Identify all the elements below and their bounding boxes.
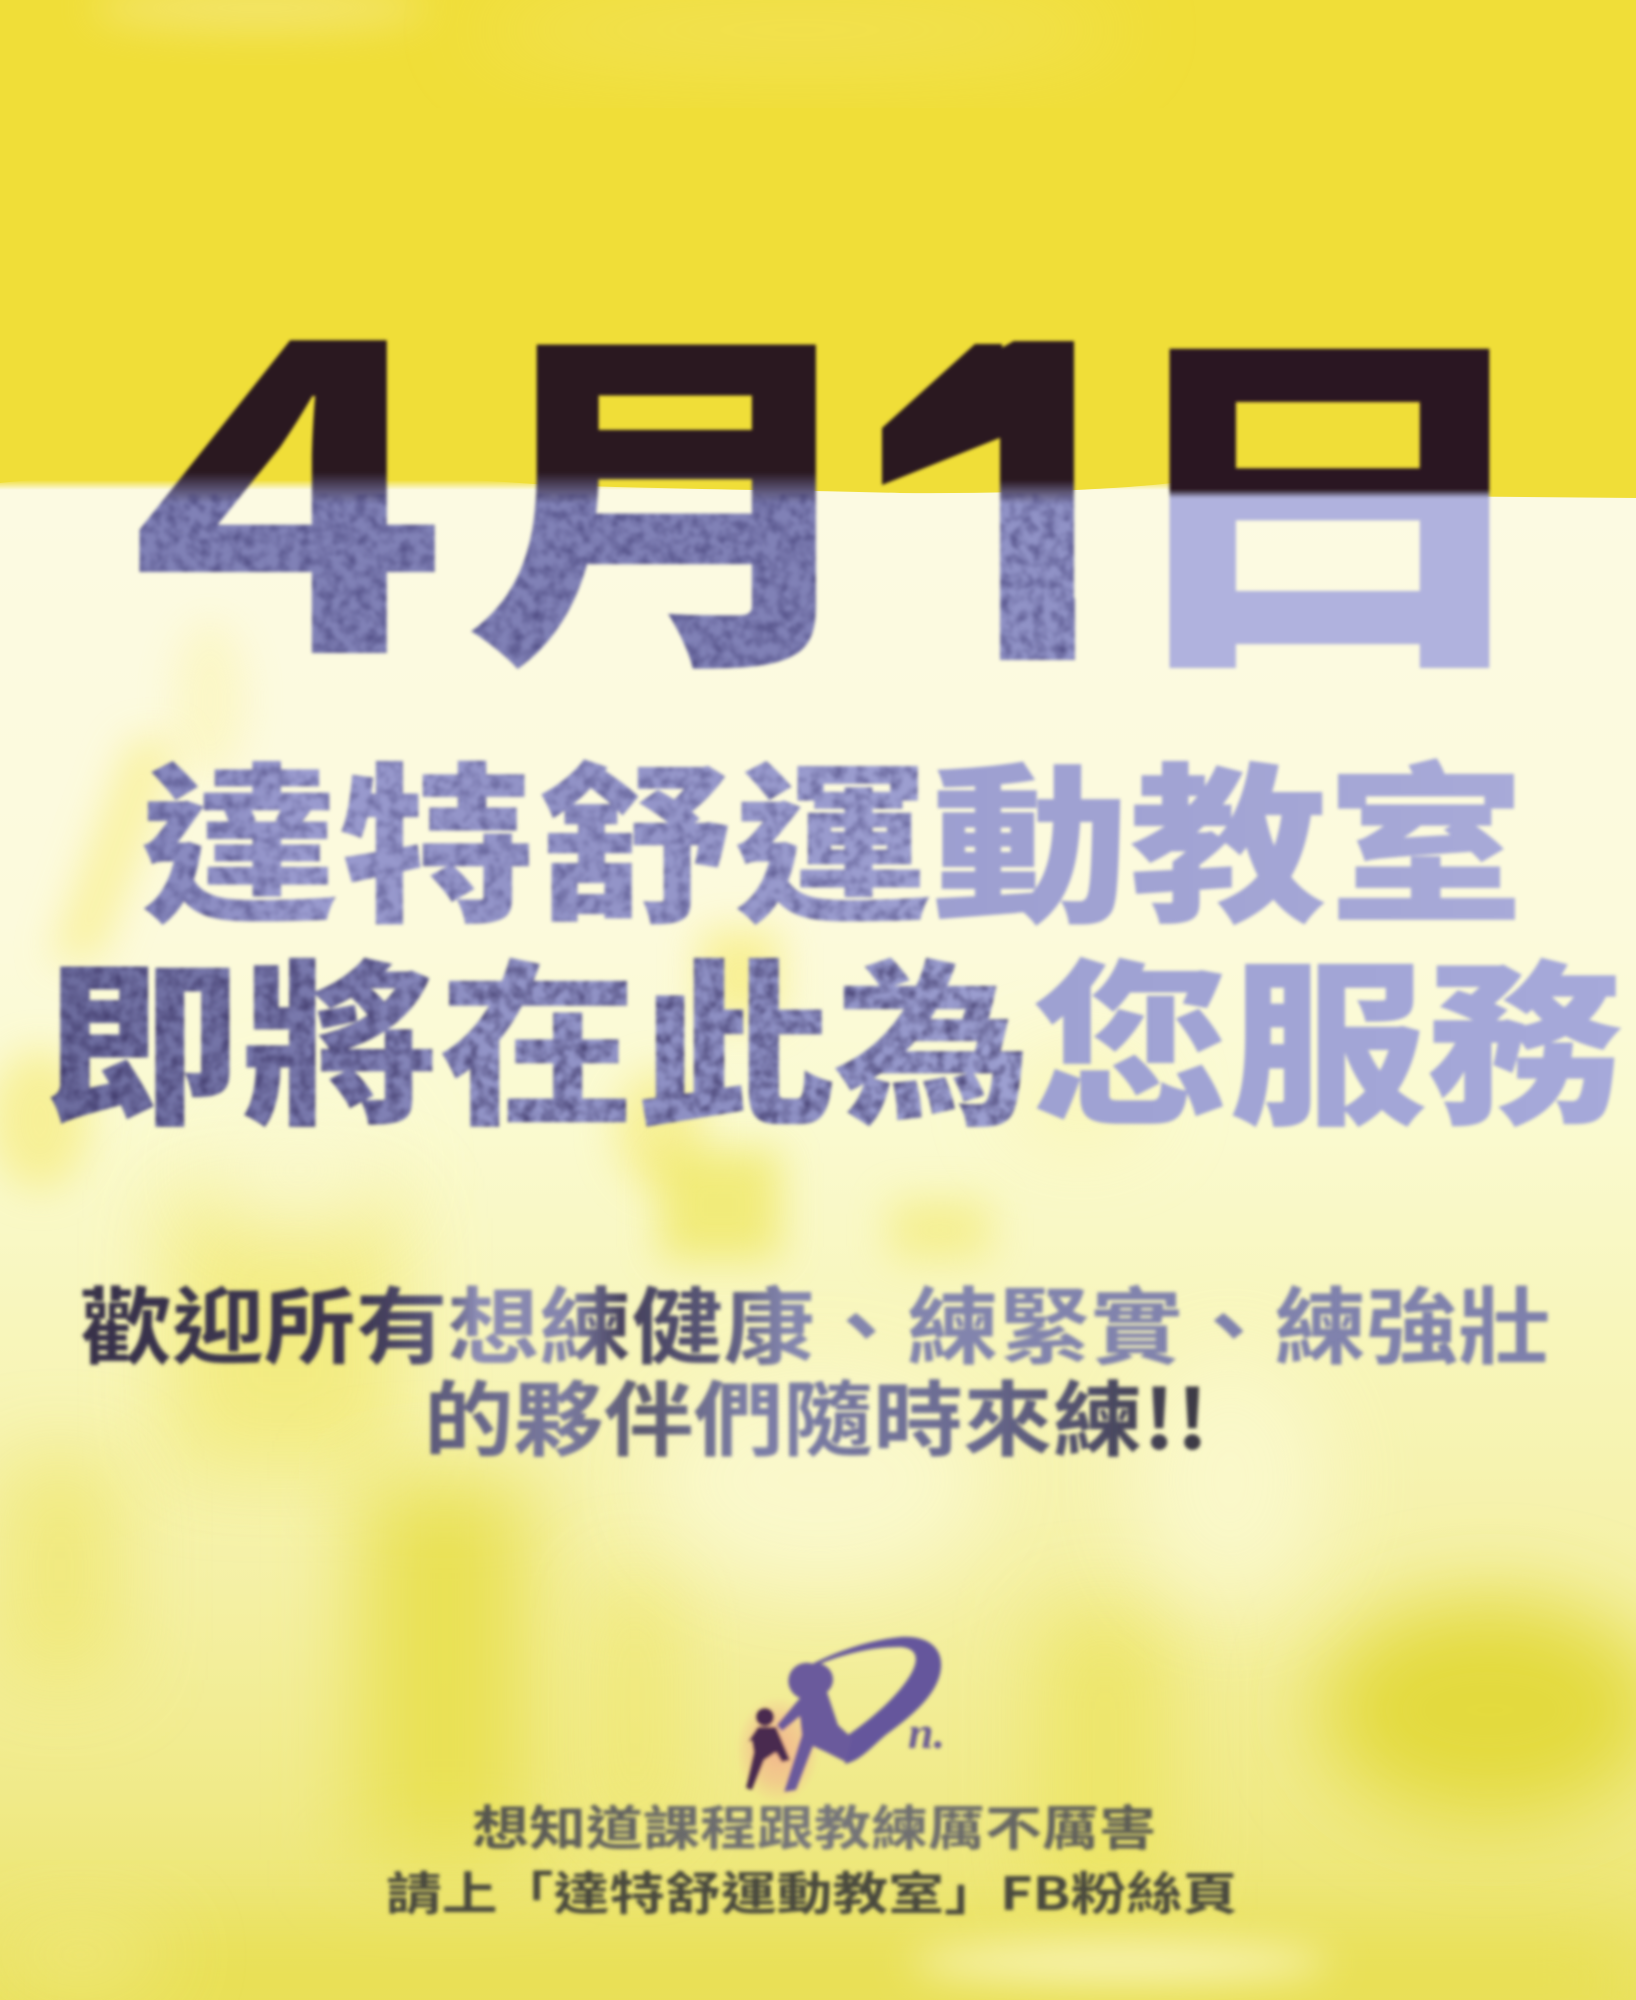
logo wordmark: n. <box>908 1707 945 1758</box>
digit 4 and month character <box>128 163 877 775</box>
yellow patches lower half <box>170 1190 400 1470</box>
logo: two figures with swoosh <box>736 1637 945 1804</box>
digit 4 and month character: 月 <box>464 221 877 739</box>
welcome line 2: 的夥伴們隨時來練!! <box>424 1354 1209 1473</box>
welcome line 1: 歡迎所有想練健康、練緊實、練強壯 <box>80 1261 1550 1382</box>
digit 1: 1 <box>883 165 1164 784</box>
welcome message <box>80 1261 1550 1473</box>
pale streaks in the cream band <box>174 620 246 780</box>
date headline: 4月1日 <box>137 338 1492 671</box>
swoosh <box>812 1637 941 1764</box>
footer note <box>386 1789 1238 1924</box>
heading line 2: 即將在此為您服務 <box>44 905 1624 1162</box>
main heading <box>44 708 1624 1162</box>
pink glow behind figures <box>736 1696 820 1804</box>
digit 4 and month character: 4 <box>128 163 450 775</box>
heading line 1: 達特舒運動教室 <box>140 708 1525 958</box>
footer line 1: 想知道課程跟教練厲不厲害 <box>472 1789 1156 1859</box>
child figure <box>746 1708 790 1790</box>
digit 1 <box>880 338 1078 662</box>
day character: 日 <box>1107 219 1550 743</box>
footer line 2: 請上「達特舒運動教室」FB粉絲頁 <box>386 1858 1238 1924</box>
pale patches lower half <box>650 1370 990 1590</box>
adult figure <box>777 1663 852 1792</box>
